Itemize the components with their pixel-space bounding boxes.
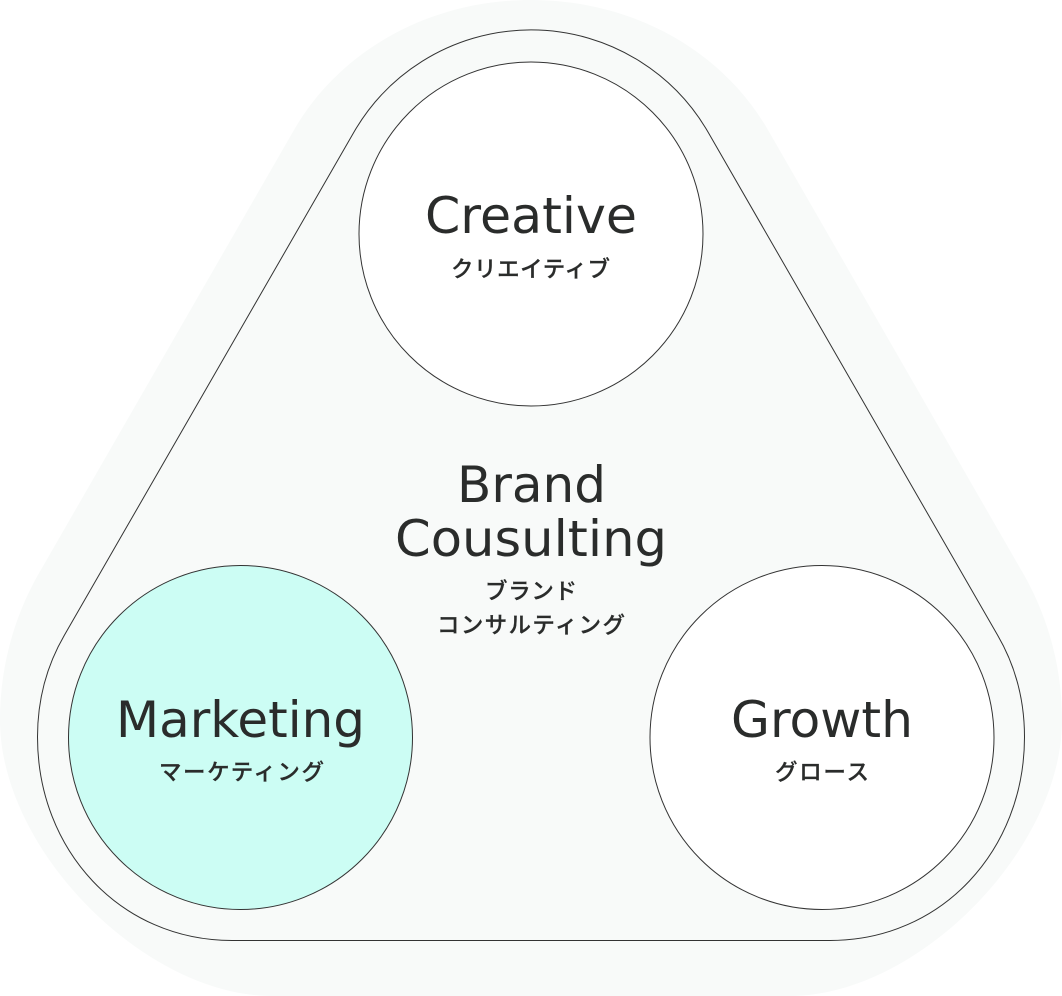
circle: Marketing [68, 566, 412, 910]
circle: Growth [650, 566, 994, 910]
center label: Brand Consulting [395, 456, 667, 638]
center label: Brand Consulting: ブランド [485, 578, 577, 604]
circle: Marketing: Marketing [116, 691, 365, 749]
center label: Brand Consulting: Brand [457, 456, 606, 514]
circle: Marketing: マーケティング [159, 760, 324, 785]
circle: Growth: グロース [775, 760, 869, 785]
circle: Creative: クリエイティブ [451, 256, 610, 282]
circle: Creative: Creative [425, 187, 637, 245]
circle: Growth: Growth [731, 691, 913, 749]
circle: Creative [359, 62, 703, 406]
center label: Brand Consulting: Cousulting [395, 510, 667, 568]
center label: Brand Consulting: コンサルティング [437, 613, 625, 638]
